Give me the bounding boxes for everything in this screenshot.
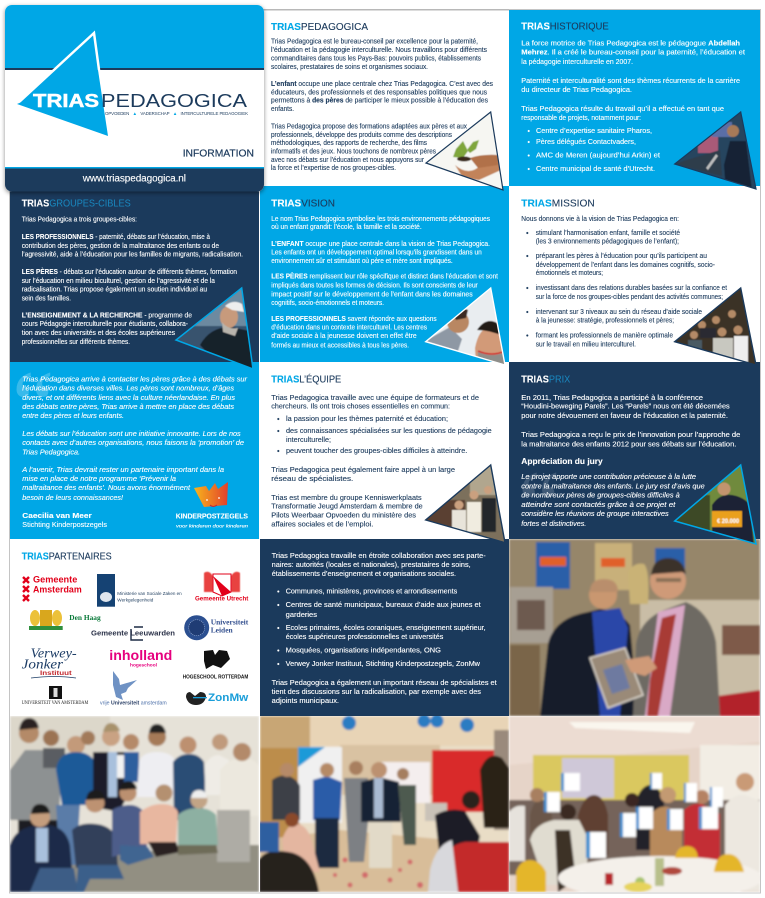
text: mission body: investissant dans des relations durables basées sur la confiance et	[536, 283, 727, 292]
text: historique body: responsable de projets, notamment pour:	[521, 113, 641, 122]
text: historique body: la pédagogie interculturelle en 2007.	[521, 57, 633, 66]
logo: vrije universiteit: vrije Universiteit amsterdam	[100, 700, 167, 706]
text: vision body: LES PROFESSIONNELS savent répondre aux questions	[271, 314, 437, 323]
photo: group of men	[10, 716, 259, 892]
text: mission body: développement de l’enfant dans les domaines cognitifs, socio-	[536, 260, 715, 269]
text: equipe body: la passion pour les thèmes paternité et éducation;	[286, 414, 448, 423]
text: organisations body: tient des discussions sur la radicalisation, par exemple avec des	[272, 687, 481, 696]
photo triangle: abdellah mehrez speaking	[674, 111, 757, 190]
logo: vrije universiteit	[100, 671, 167, 706]
text: organisations body: Communes, ministères, provinces et arrondissements	[286, 586, 458, 596]
text: groupes-cibles body: contribution des pères, gestion de la maltraitance des enfants ou de	[22, 241, 219, 250]
text: mission body: à la jeunesse: stratégie, professionnels et pères;	[536, 316, 674, 324]
text: prix body	[521, 393, 740, 466]
logo: gemeente amsterdam: Gemeente	[33, 575, 77, 585]
logo wordmark: PEDAGOGICA	[101, 90, 248, 111]
logo: hogeschool rotterdam	[183, 650, 249, 680]
photo: women with certificates	[509, 716, 762, 898]
text: pedagogica body: permettons à des pères de participer le mieux possible à l’éducation des	[271, 96, 488, 105]
logo: gemeente leeuwarden: Gemeente Leeuwarden	[91, 629, 175, 638]
text: pedagogica body: commanditaires dans tous les Pays-Bas: pouvoirs publics, établissements	[271, 53, 481, 62]
text: jury citation: Le projet apporte une contribution précieuse à la lutte	[521, 472, 696, 481]
text: mission body: stimulant l’harmonisation enfant, famille et société	[536, 228, 680, 237]
text: mission body: préparant les pères à l’éducation pour qu’ils participent au	[536, 251, 707, 260]
text: pedagogica body: Trias Pedagogica est le bureau-conseil par excellence pour la paternité,	[271, 36, 478, 46]
text: organisations body: établissements d’enseignement et organisations sociales.	[272, 569, 456, 578]
text: quote: divers, et ont différents liens avec la culture néerlandaise. En plus	[22, 393, 235, 402]
text: equipe body: interculturelle;	[286, 435, 331, 444]
text: groupes-cibles body: l’agressivité, aide à l’éducation pour les familles de migrants, radicalisation.	[22, 250, 243, 258]
photo: two men with book	[509, 539, 760, 716]
photo triangle: team	[424, 464, 505, 542]
text: pedagogica body: Trias Pedagogica propose des formations adaptées aux pères et aux	[271, 122, 467, 130]
text: jury citation: considère les réunions de groupe interactives	[521, 509, 669, 518]
text: groupes-cibles body: LES PROFESSIONNELS - paternité, débats sur l’éducation, mise à	[22, 232, 211, 241]
panel: groupes-cibles	[10, 186, 259, 362]
label: information: INFORMATION	[183, 148, 254, 160]
logo: gemeente utrecht	[195, 572, 249, 603]
heading: pedagogica: TRIASPEDAGOGICA	[271, 21, 368, 33]
logo: gemeente utrecht: Gemeente Utrecht	[195, 596, 249, 603]
text: jury citation: contre la maltraitance des enfants. Le jury est d’avis que	[521, 482, 705, 490]
text: mission body: intervenant sur 3 niveaux au sein du réseau d’aide sociale	[536, 307, 702, 316]
text: prix body: “Houdini-beweging Parels”. Les “Parels” nous ont été décernées	[521, 402, 730, 410]
text: historique body: Mehrez. Il a créé le bureau-conseil pour la paternité, l’éducation et	[521, 48, 745, 56]
text: vision body: environnement sûr et stimulant où père et mère sont impliqués.	[271, 256, 453, 265]
logo: zonmw: ZonMw	[208, 692, 249, 704]
text: equipe body: Pilots Weerbaar Opvoeden du ministère des	[271, 510, 416, 520]
text: groupes-cibles body: sein des familles.	[22, 294, 71, 302]
panel: mission	[509, 186, 760, 362]
text: quote: Trias Pedagogica.	[22, 448, 80, 457]
text: quote: entre des pères et leurs enfants.	[22, 411, 124, 420]
heading: prix: TRIASPRIX	[521, 374, 570, 386]
text: organisations body: Trias Pedagogica a également un important réseau de spécialistes et	[272, 678, 497, 687]
text: organisations body: Verwey Jonker Instituut, Stichting Kinderpostzegels, ZonMw	[286, 659, 481, 668]
text: historique body	[521, 38, 745, 173]
panel: vision	[260, 186, 509, 362]
logo: universiteit van amsterdam: UNIVERSITEIT VAN AMSTERDAM	[22, 701, 89, 706]
text: vision body: d’éducation dans un contexte interculturel. Les centres	[271, 322, 427, 332]
text: jury citation	[521, 472, 705, 528]
text: organisations body: naires: autorités (locales et nationales), prestataires de soins,	[272, 560, 471, 569]
text: groupes-cibles body: LES PÈRES - débats sur l’éducation autour de différents thèmes, formation	[22, 267, 237, 276]
logo: universiteit leiden: Leiden	[211, 625, 233, 634]
text: pedagogica body: L’enfant occupe une place centrale chez Trias Pedagogica. C’est avec des	[271, 79, 493, 88]
photo triangle: man with white cap	[174, 286, 253, 368]
decorative quote mark: “	[518, 451, 560, 557]
panel: equipe	[260, 362, 509, 539]
text: pedagogica body: scolaires, prestataires de soins et organismes sociaux.	[271, 62, 428, 71]
logo: verwey-jonker instituut: Verwey-	[31, 647, 77, 662]
text: jury citation: atteindre sont contactés grâce à ce projet et	[521, 500, 676, 509]
panel: prix	[509, 362, 760, 557]
text: historique body: La force motrice de Trias Pedagogica est le pédagogue Abdellah	[521, 38, 740, 48]
logo text: kinderpostzegels: voor kinderen door kinderen	[176, 524, 249, 529]
text: organisations body: Ecoles primaires, écoles coraniques, enseignement supérieur,	[286, 623, 486, 632]
logo: zonmw	[186, 692, 249, 705]
text: groupes-cibles body: sur l’éducation en milieu biculturel, gestion de l’agressivité et de la	[22, 276, 216, 285]
text: signature: Caecilia van Meer	[22, 511, 92, 520]
text: quote: Trias Pedagogica arrive à contacter les pères grâce à des débats sur	[22, 374, 248, 384]
text: historique body: Centre municipal de santé d’Utrecht.	[536, 164, 655, 173]
text: vision body: formés au mieux et accessibles à tous les pères.	[271, 340, 409, 350]
text: mission body: sur la force de nos groupes-cibles pendant des activités communes;	[536, 292, 723, 301]
text: organisations body: écoles supérieures professionnelles et universités	[286, 632, 444, 641]
photo triangle: father and son	[424, 286, 506, 364]
text: mission body: émotionnels et moteurs;	[536, 268, 603, 277]
text: quote: mise en place de notre programme ‘Prévenir la	[22, 474, 176, 483]
text: pedagogica body: éducateurs, des professionnels et des responsables politiques que nous	[271, 88, 487, 96]
text: pedagogica body: avec nos débats sur l’éducation et nous appuyons sur	[271, 155, 424, 164]
text: signature: Stichting Kinderpostzegels	[22, 520, 107, 529]
text: organisations body: Mosquées, organisations indépendantes, ONG	[286, 646, 441, 654]
logo: gemeente amsterdam	[23, 575, 82, 601]
text: jury citation: de nombreux pères de groupes-cibles difficiles à	[521, 490, 680, 500]
text: historique body: Centre d’expertise sanitaire Pharos,	[536, 126, 652, 135]
text: prix body: En 2011, Trias Pedagogica a participé à la conférence	[521, 393, 703, 402]
logo triangle	[17, 33, 108, 136]
text: prix body: Trias Pedagogica a reçu le prix de l’innovation pour l’approche de	[521, 430, 740, 439]
heading: equipe: TRIASL’ÉQUIPE	[271, 373, 341, 386]
text: prix body: Appréciation du jury	[521, 457, 603, 466]
text: quote: Les débats sur l’éducation sont une initiative innovante. Lors de nos	[22, 429, 241, 438]
text: quote: A l’avenir, Trias devrait rester un partenaire important dans la	[21, 465, 224, 474]
text: pedagogica body: l’éducation et la pédagogie interculturelle. Nous travaillons pour différents	[271, 45, 487, 54]
logo: ministerie: Werkgelegenheid	[117, 597, 154, 602]
panel: historique	[509, 10, 760, 186]
text: jury citation: fortes et distinctives.	[521, 519, 586, 528]
logo wordmark	[33, 90, 248, 116]
logo: verwey-jonker instituut: Jonker	[22, 657, 64, 672]
logo: den haag: Den Haag	[69, 613, 101, 622]
text: pedagogica body: informatifs et des jeux. Nous touchons de nombreux pères	[271, 146, 436, 156]
logo: gemeente leeuwarden	[91, 627, 175, 640]
text: quote: des débats entre pères, Trias arrive à mettre en place des débats	[22, 402, 234, 411]
text: organisations body	[272, 551, 497, 705]
text: prix body: la maltraitance des enfants 2012 pour ses débats sur l’éducation.	[521, 440, 736, 448]
text: equipe body: Transformatie Jeugd Amsterdam & membre de	[271, 502, 423, 510]
text: mission body	[521, 214, 727, 348]
logo card	[5, 5, 264, 192]
photo triangle: hands with plant	[424, 110, 504, 191]
text: quote	[21, 374, 248, 502]
logo: ministerie	[97, 574, 182, 607]
text: groupes-cibles body: professionnelles sur différents thèmes.	[22, 337, 130, 346]
text: pedagogica body: méthodologiques, des rapports de recherche, des films	[271, 138, 427, 147]
text: vision body: LES PÈRES remplissent leur rôle spécifique et distinct dans l’éducation et sont	[271, 272, 498, 280]
logo: hogeschool rotterdam: HOGESCHOOL ROTTERDAM	[183, 674, 249, 680]
text: historique body: Trias Pedagogica résulte du travail qu’il a effectué en tant que	[521, 104, 724, 113]
text: equipe body: Trias Pedagogica peut également faire appel à un large	[271, 465, 455, 474]
heading: groupes-cibles: TRIASGROUPES-CIBLES	[22, 197, 131, 209]
panel: organisations	[260, 539, 509, 716]
text: organisations body: Trias Pedagogica travaille en étroite collaboration avec ses parte-	[272, 551, 486, 560]
text: vision body: Le nom Trias Pedagogica symbolise les trois environnements pédagogiques	[271, 214, 490, 223]
heading: partenaires: TRIASPARTENAIRES	[22, 551, 112, 563]
decorative quote mark: “	[12, 351, 54, 457]
logo wordmark: OPVOEDEN ▲ VADERSCHAP ▲ INTERCULTURELE PEDAGOGIEK	[105, 111, 248, 116]
text: equipe body: Trias Pedagogica travaille avec une équipe de formateurs et de	[271, 393, 479, 402]
text: quote: l’éducation dans diverses villes. Les pères sont nombreux, d’âges	[22, 384, 234, 392]
text: groupes-cibles body: tion avec des universités et des écoles supérieures	[22, 328, 175, 337]
logo: inholland: inholland	[109, 647, 172, 663]
text: quote: besoin de leurs connaissances!	[22, 493, 123, 502]
text: mission body: (les 3 environnements pédagogiques de l’enfant);	[536, 236, 679, 246]
logo: verwey-jonker instituut	[22, 647, 77, 678]
text: equipe body: Trias est membre du groupe Kenniswerkplaats	[271, 493, 422, 502]
text: pedagogica body: la force et l’expertise de nos groupes-cibles.	[271, 163, 396, 172]
photo triangle: man with prize cheque	[670, 463, 760, 547]
photo: celebration room	[259, 714, 509, 892]
heading: historique: TRIASHISTORIQUE	[521, 20, 609, 32]
text: mission body: Nous donnons vie à la vision de Trias Pedagogica en:	[521, 214, 679, 223]
text: organisations body: garderies	[286, 610, 317, 619]
logo: universiteit van amsterdam	[22, 686, 89, 706]
text: quote: contacts avec d’autres organisations, nous faisons la ‘promotion’ de	[22, 438, 244, 447]
text: vision body	[271, 214, 498, 350]
text: historique body: Paternité et interculturalité sont des thèmes récurrents de la carrière	[521, 76, 740, 85]
text: groupes-cibles body: Trias Pedagogica a trois groupes-cibles:	[22, 214, 137, 224]
website url: www.triaspedagogica.nl	[82, 174, 186, 185]
text: equipe body: affaires sociales et de l’emploi.	[271, 520, 373, 528]
logo: universiteit leiden	[184, 615, 249, 640]
text: groupes-cibles body: radicalisation. Trias propose également un soutien individuel au	[22, 284, 207, 294]
logo: gemeente amsterdam: Amsterdam	[33, 584, 82, 594]
logo: universiteit leiden: Universiteit	[211, 617, 249, 626]
text: equipe body	[271, 393, 492, 528]
text: organisations body: adjoints municipaux.	[272, 696, 339, 705]
text: vision body: cognitifs, socio-émotionnels et moteurs.	[271, 298, 384, 307]
logo: inholland: hogeschool	[130, 663, 157, 668]
text: pedagogica body: enfants.	[271, 104, 294, 113]
text: historique body: Pères délégués Contactvaders,	[536, 137, 636, 146]
text: groupes-cibles body	[22, 214, 243, 346]
panel: pedagogica intro	[260, 9, 509, 186]
panel: quote kinderpostzegels	[10, 351, 259, 539]
logo text: kinderpostzegels: KINDERPOSTZEGELS	[176, 514, 248, 521]
text: equipe body: chercheurs. Ils ont trois choses essentielles en commun:	[271, 402, 450, 410]
photo triangle: school children	[673, 286, 756, 364]
heading: mission: TRIASMISSION	[521, 198, 595, 210]
logo: den haag	[29, 610, 101, 630]
text: vision body: Les enfants ont un développement optimal lorsqu’ils grandissent dans un	[271, 248, 482, 256]
text: pedagogica body: professionnels, développe des produits comme des descriptions	[271, 130, 452, 139]
text: pedagogica body	[271, 36, 493, 172]
text: mission body: sur le travail en milieu interculturel.	[536, 340, 636, 348]
text: vision body: d’aide sociale à la jeunesse doivent en effet être	[271, 331, 417, 340]
text: equipe body: peuvent toucher des groupes-cibles difficiles à atteindre.	[286, 446, 467, 455]
text: prix body: pour notre dévouement en faveur de l’éducation et la paternité.	[521, 411, 728, 420]
logo: verwey-jonker instituut: Instituut	[40, 670, 73, 677]
text: vision body: L’ENFANT occupe une place centrale dans la vision de Trias Pedagogica.	[271, 239, 490, 248]
text: quote: maltraitance des enfants’. Nous avons énormément	[22, 483, 191, 492]
text: organisations body: Centres de santé municipaux, bureaux d’aide aux jeunes et	[286, 600, 481, 609]
logo wordmark: TRIAS	[33, 90, 99, 111]
panel: partenaires	[10, 539, 259, 716]
text: vision body: où un enfant grandit: l’école, la famille et la société.	[271, 222, 422, 231]
photo triangle: man with prize cheque: € 20.000	[717, 519, 740, 525]
text: equipe body: réseau de spécialistes.	[271, 474, 353, 483]
text: signature	[22, 511, 107, 529]
icon: kinderpostzegels crown	[194, 482, 228, 507]
text: equipe body: des connaissances spécialisées sur les questions de pédagogie	[286, 426, 492, 435]
text: groupes-cibles body: L’ENSEIGNEMENT & LA RECHERCHE - programme de	[22, 310, 192, 320]
text: historique body: AMC de Meren (aujourd’hui Arkin) et	[536, 150, 660, 160]
text: mission body: formant les professionnels de manière optimale	[536, 330, 673, 340]
heading: vision: TRIASVISION	[271, 198, 335, 210]
text: vision body: impact positif sur le développement de l’enfant dans les domaines	[271, 290, 473, 298]
text: vision body: impliqués dans toutes les formes de décision. Ils sont conscients de leur	[271, 280, 478, 290]
text: groupes-cibles body: cours Pédagogie interculturelle pour étudiants, collabora-	[22, 319, 189, 328]
logo text: kinderpostzegels	[176, 514, 249, 529]
logo: ministerie: Ministerie van Sociale Zaken en	[117, 591, 182, 596]
text: historique body: du directeur de Trias Pedagogica.	[521, 85, 632, 94]
